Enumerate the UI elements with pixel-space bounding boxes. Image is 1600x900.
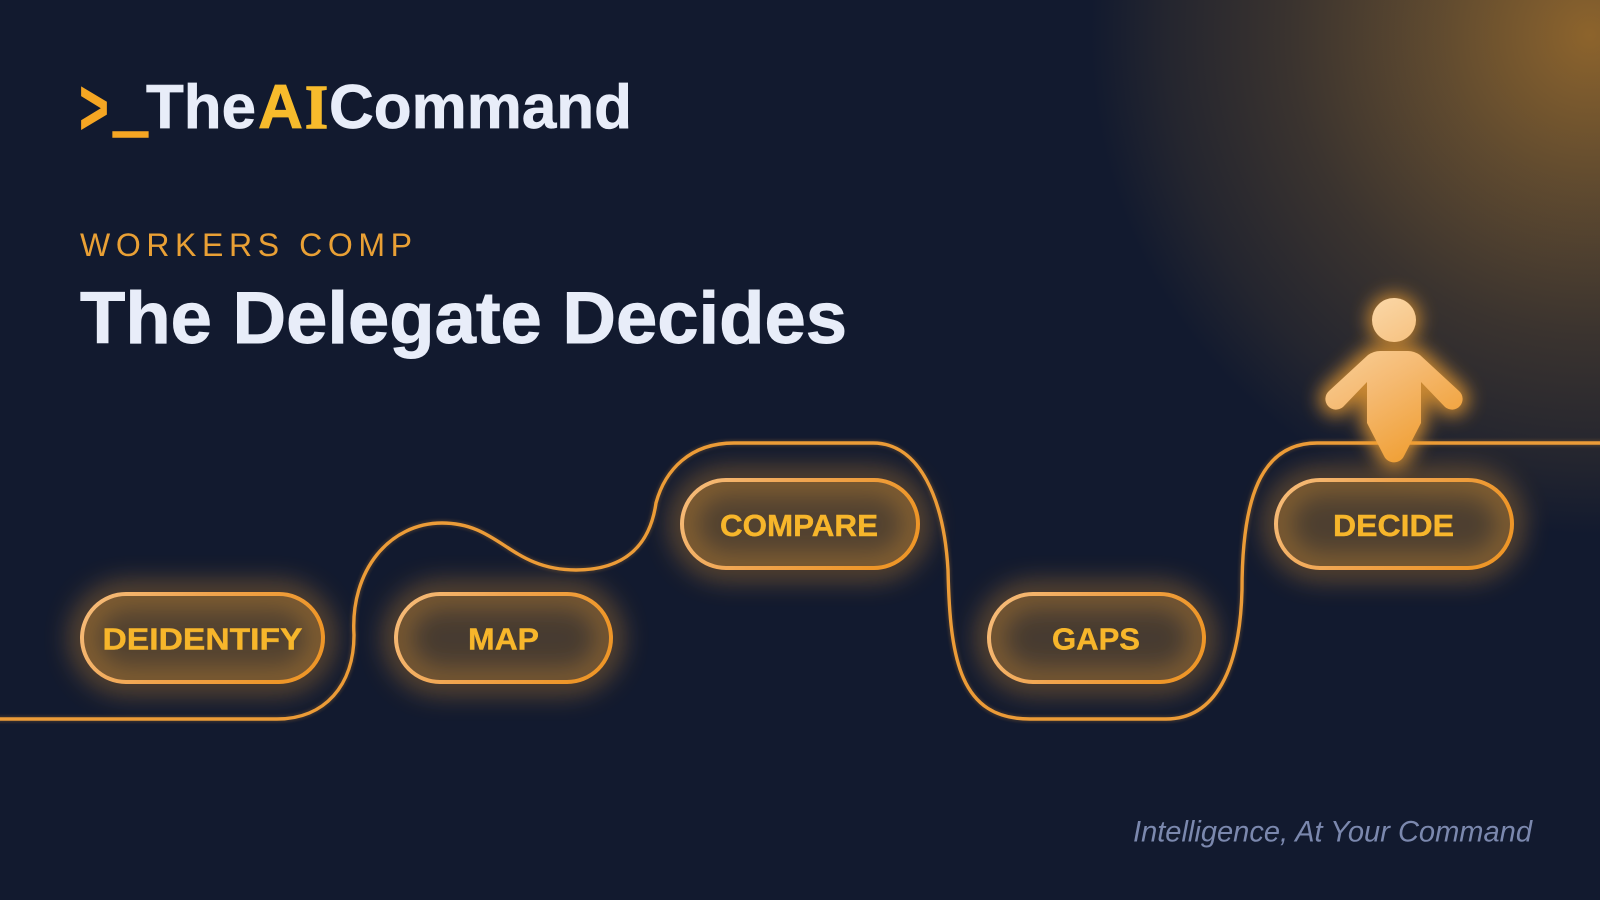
pill: decide: DECIDE [1333,508,1454,543]
winding path [0,443,1600,719]
pill: compare [682,480,918,568]
logo: The [146,73,256,142]
pill: deidentify: DEIDENTIFY [102,622,303,656]
pill: deidentify [82,594,323,682]
logo: _ [113,77,148,149]
logo: A [258,73,303,142]
tagline: Intelligence, At Your Command [1133,816,1533,848]
pill: gaps: GAPS [1052,622,1140,656]
logo: Command [329,73,632,142]
pill: decide [1276,480,1512,568]
pill: gaps [989,594,1204,682]
logo [79,70,632,158]
icon: person on path [1325,294,1463,462]
logo: I [305,74,328,142]
corner glow [1050,0,1600,560]
logo: > [79,70,109,158]
pill: compare: COMPARE [720,508,878,543]
title: The Delegate Decides [80,278,847,359]
eyebrow: workers comp: WORKERS COMP [80,227,412,263]
pill: map [396,594,611,682]
pill: map: MAP [468,622,539,656]
